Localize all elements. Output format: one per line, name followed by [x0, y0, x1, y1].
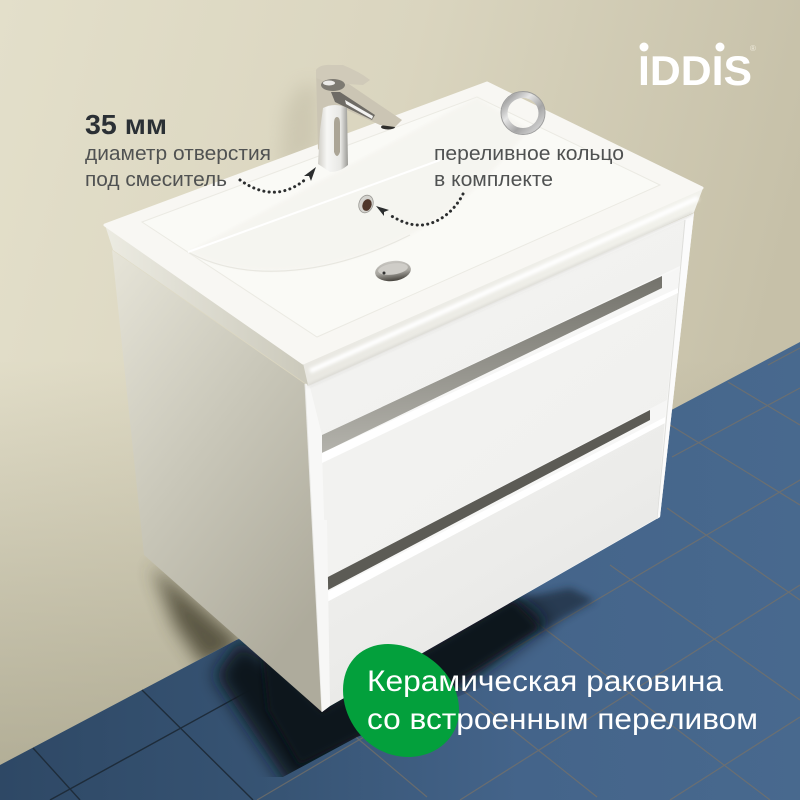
- ceramic washbasin: [105, 83, 702, 386]
- basin rounded highlight: [310, 198, 698, 371]
- callout: faucet hole diameter: под смеситель: [85, 169, 227, 191]
- cabinet side panel: [112, 250, 322, 712]
- basin front face: [303, 188, 702, 385]
- faucet lever: [316, 65, 370, 85]
- lower drawer: [327, 417, 665, 706]
- wall shadow under cabinet: [152, 565, 245, 668]
- vanity cabinet: [112, 213, 694, 712]
- overflow ring icon: [501, 92, 545, 134]
- upper drawer gap: [322, 268, 680, 453]
- headline: Керамическая раковина: [367, 665, 723, 698]
- basin inner bowl: [142, 97, 660, 337]
- callout: overflow ring: переливное кольцо: [434, 143, 624, 165]
- wall shadow of faucet: [280, 85, 318, 170]
- basin top surface: [105, 83, 702, 363]
- lower drawer gap: [326, 400, 667, 592]
- logo: IDDIS: ®: [750, 44, 756, 53]
- cabinet front body: [305, 213, 694, 712]
- faucet: [316, 65, 402, 172]
- faucet neck and spout: [316, 70, 402, 150]
- callout: faucet hole diameter: 35 мм: [85, 109, 167, 140]
- callout: faucet hole diameter: [85, 109, 271, 191]
- upper drawer: [322, 288, 678, 578]
- top rail: [310, 220, 685, 435]
- headline: [367, 665, 758, 736]
- callout: faucet hole diameter: диаметр отверстия: [85, 143, 271, 165]
- arrow: to faucet hole: [240, 167, 316, 192]
- arrow: to overflow hole: [376, 194, 463, 225]
- tiled floor: [0, 342, 800, 800]
- basin side face: [105, 225, 308, 385]
- chrome joint: [321, 79, 375, 120]
- faucet chrome body: [318, 105, 348, 172]
- right edge strip: [657, 213, 694, 519]
- green blob accent: [343, 644, 459, 757]
- left front strip: [313, 520, 330, 712]
- logo: IDDIS: IDDIS: [638, 47, 752, 94]
- floor shadow under cabinet: [215, 588, 595, 790]
- callout: overflow ring: в комплекте: [434, 169, 553, 191]
- headline: со встроенным переливом: [367, 703, 758, 736]
- overflow hole: [356, 193, 376, 215]
- drain: [374, 259, 412, 283]
- callout: overflow ring: [434, 143, 624, 191]
